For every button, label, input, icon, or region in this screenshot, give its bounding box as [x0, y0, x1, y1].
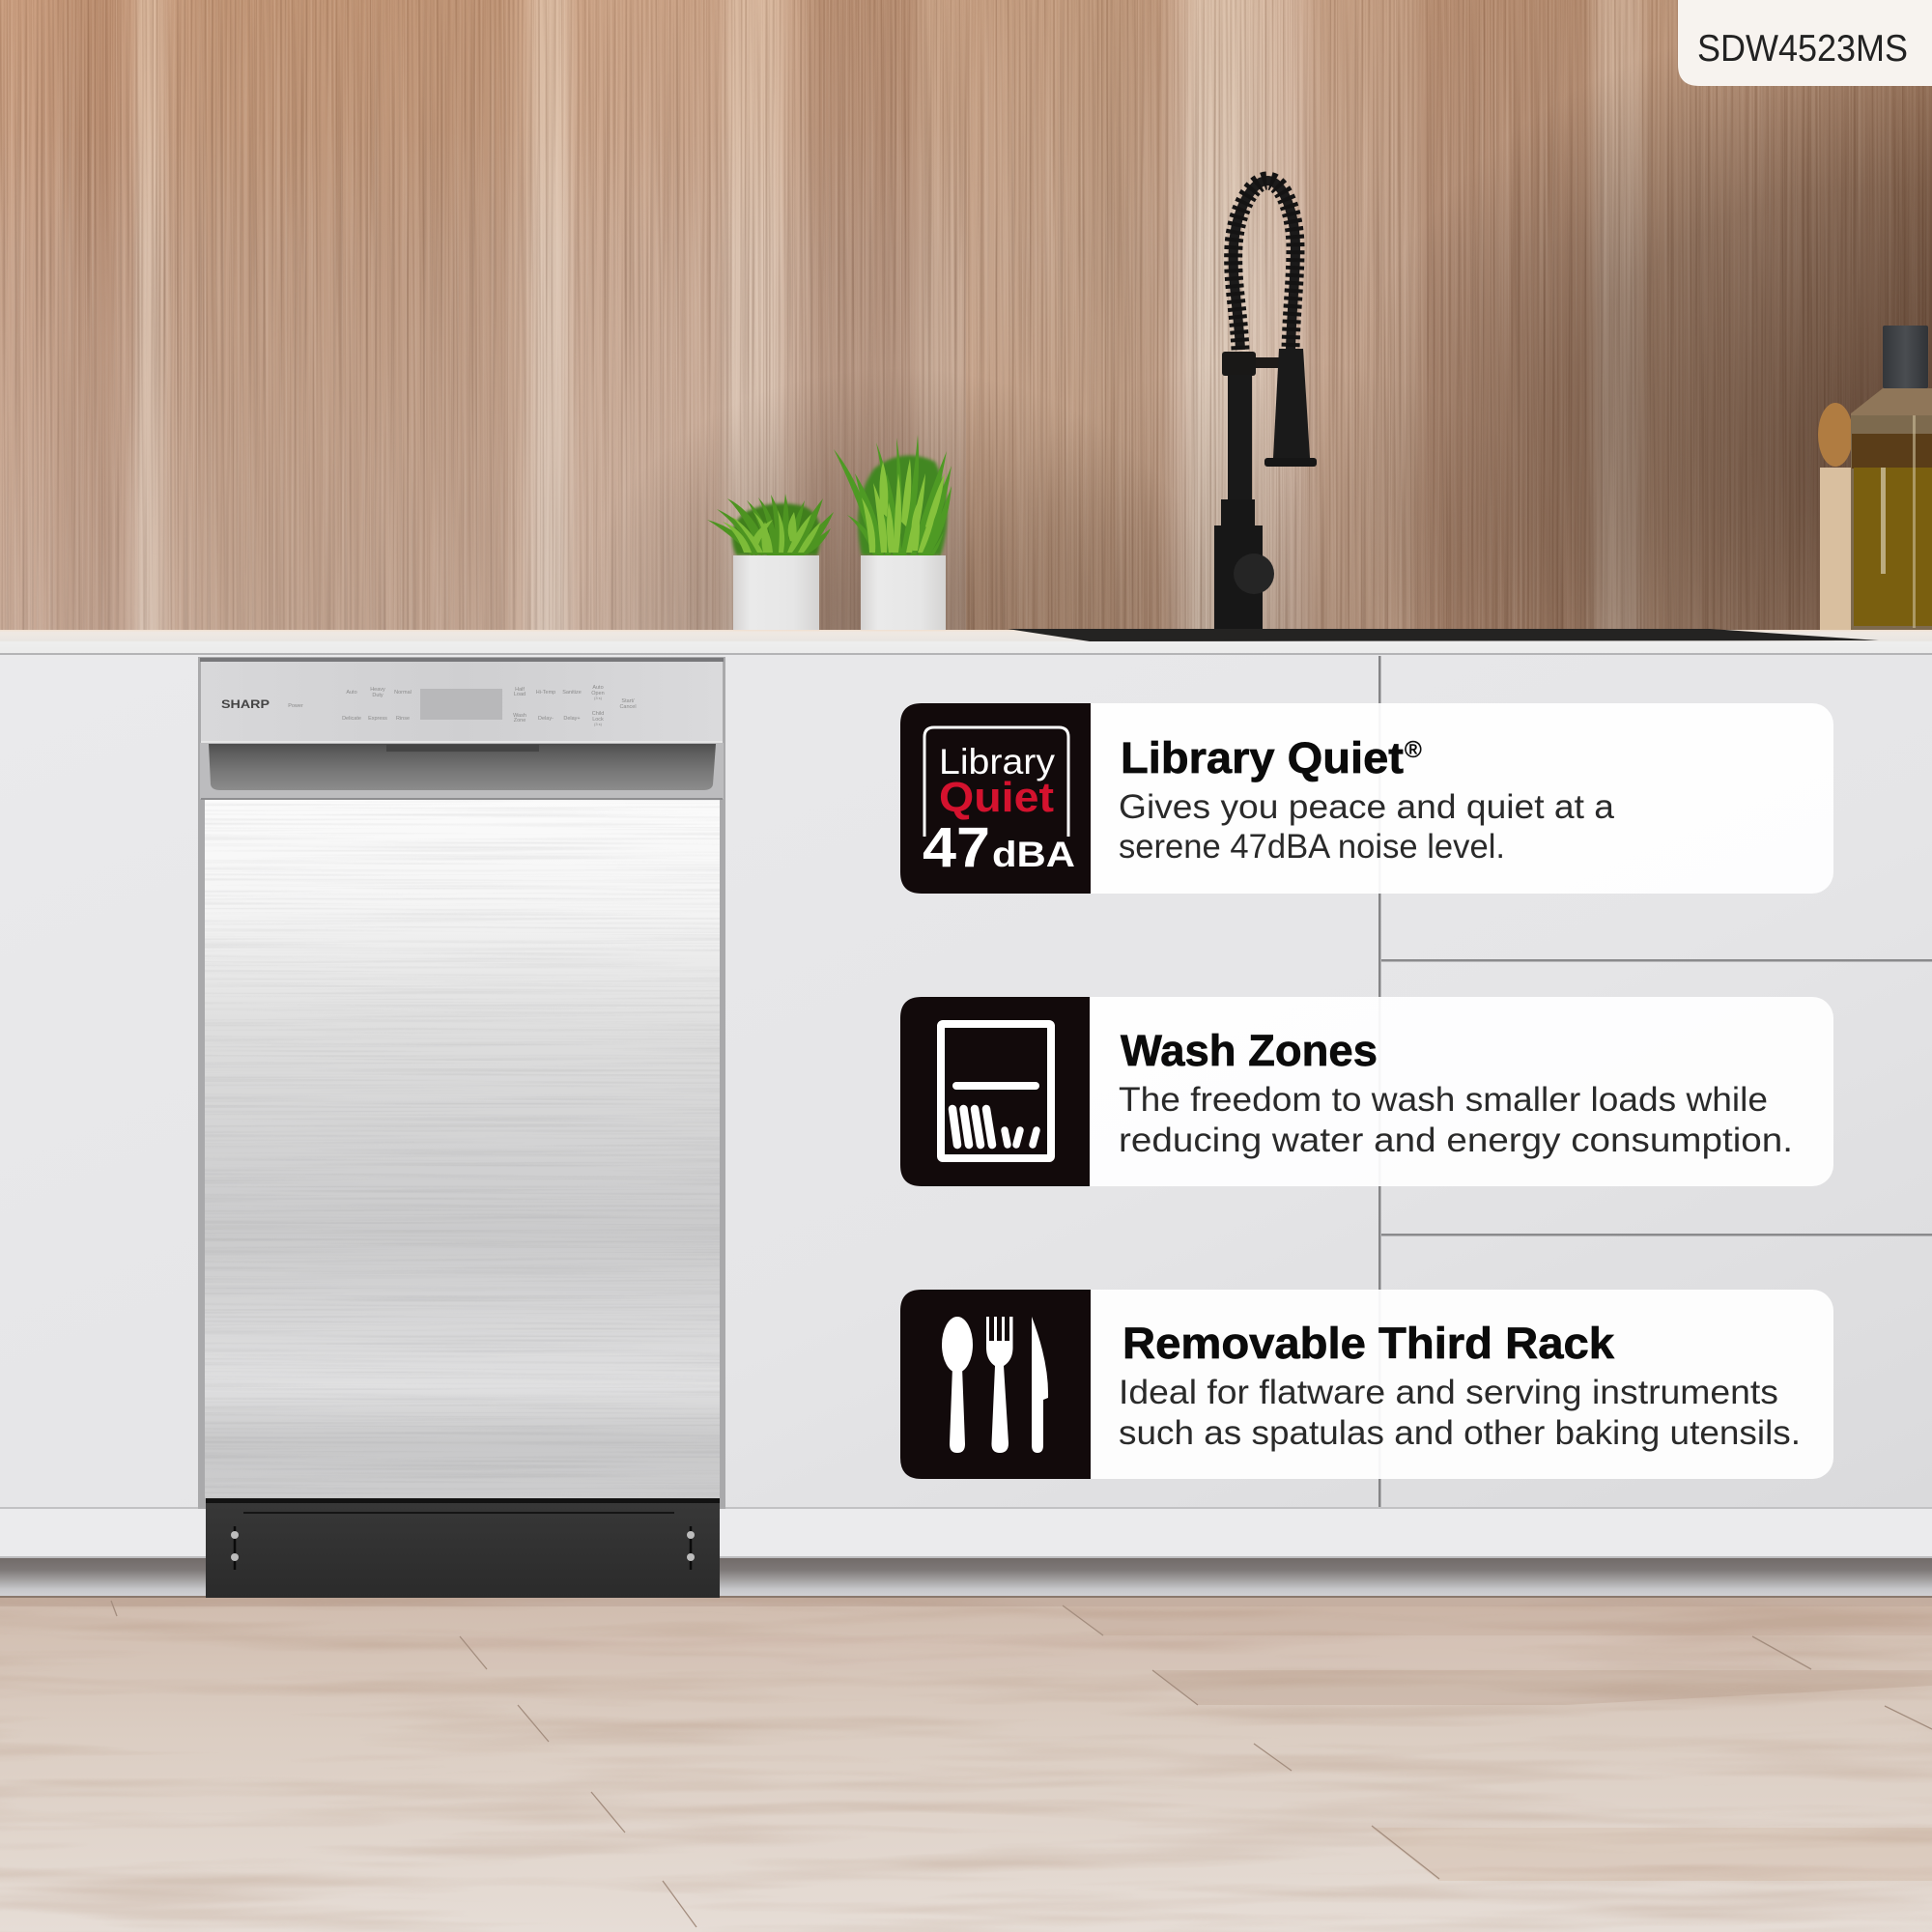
- icon: Library Quiet 47 dBA badge: Library: [939, 742, 1056, 781]
- dishwasher: [198, 657, 725, 1598]
- countertop and sink: [0, 629, 1932, 654]
- control panel: Cancel: [619, 704, 637, 710]
- control panel: (3 s): [594, 722, 603, 726]
- faucet: [1214, 181, 1317, 630]
- control panel: Heavy: [370, 687, 385, 693]
- control panel: Duty: [372, 693, 384, 698]
- door: [205, 799, 720, 1498]
- heading: ®: [1405, 737, 1422, 763]
- control panel: Auto: [346, 690, 357, 696]
- control panel: Lock: [592, 717, 604, 723]
- wood panel wall: [0, 0, 1932, 898]
- control panel: Child: [592, 711, 604, 717]
- description: serene 47dBA noise level.: [1119, 828, 1505, 866]
- icon: Library Quiet 47 dBA badge: Quiet: [939, 774, 1054, 821]
- icon: dishwasher rack: [941, 1024, 1051, 1158]
- control panel: Zone: [514, 718, 526, 724]
- handle recess: [200, 743, 724, 800]
- lower cabinets: [0, 653, 1932, 1597]
- heading: Library Quiet: [1121, 733, 1404, 782]
- control panel: Sanitize: [562, 690, 582, 696]
- control panel: Delay+: [563, 716, 581, 722]
- control panel: Auto: [592, 685, 604, 691]
- potted plant left: [707, 494, 834, 555]
- control panel: Hi-Temp: [536, 690, 555, 696]
- control panel: Power: [288, 703, 303, 709]
- icon: Library Quiet 47 dBA badge: dBA: [992, 835, 1075, 874]
- utensil box and oil bottle: [1818, 326, 1932, 634]
- control panel: Normal: [394, 690, 412, 696]
- control panel: Delicate: [342, 716, 361, 722]
- white pots: [733, 555, 946, 631]
- description: [1119, 788, 1615, 866]
- description: [1119, 1081, 1793, 1159]
- control panel: Rinse: [396, 716, 410, 722]
- control panel: Start/: [621, 698, 635, 704]
- control panel: Delay-: [538, 716, 554, 722]
- control panel: Express: [368, 716, 387, 722]
- control panel: Wash: [513, 713, 526, 719]
- icon: Library Quiet 47 dBA badge: 47: [923, 816, 990, 879]
- feature card: Library Quiet: [900, 703, 1833, 894]
- icon: Library Quiet 47 dBA badge: [923, 727, 1075, 879]
- heading: Removable Third Rack: [1122, 1319, 1615, 1368]
- description: The freedom to wash smaller loads while: [1119, 1081, 1768, 1119]
- description: Gives you peace and quiet at a: [1119, 788, 1615, 826]
- icon: spoon fork knife: [942, 1317, 1048, 1453]
- heading: Wash Zones: [1121, 1026, 1378, 1075]
- control panel: Half: [515, 687, 525, 693]
- description: Ideal for flatware and serving instruments: [1119, 1374, 1778, 1411]
- toe kick: [206, 1498, 720, 1598]
- potted plant right: [834, 435, 952, 555]
- control panel: (3 s): [594, 696, 603, 700]
- control panel: SHARP: [221, 699, 270, 711]
- description: such as spatulas and other baking utensils.: [1119, 1414, 1801, 1452]
- control panel: [200, 658, 724, 743]
- feature card: Removable Third Rack: [900, 1290, 1833, 1479]
- model number tag: [1678, 0, 1932, 86]
- description: [1119, 1374, 1801, 1452]
- model number tag: SDW4523MS: [1697, 28, 1908, 70]
- control panel: Open: [591, 691, 605, 696]
- description: reducing water and energy consumption.: [1119, 1122, 1793, 1159]
- feature card: Wash Zones: [900, 997, 1833, 1186]
- wooden floor: [0, 1596, 1932, 1932]
- control panel: Load: [514, 692, 526, 697]
